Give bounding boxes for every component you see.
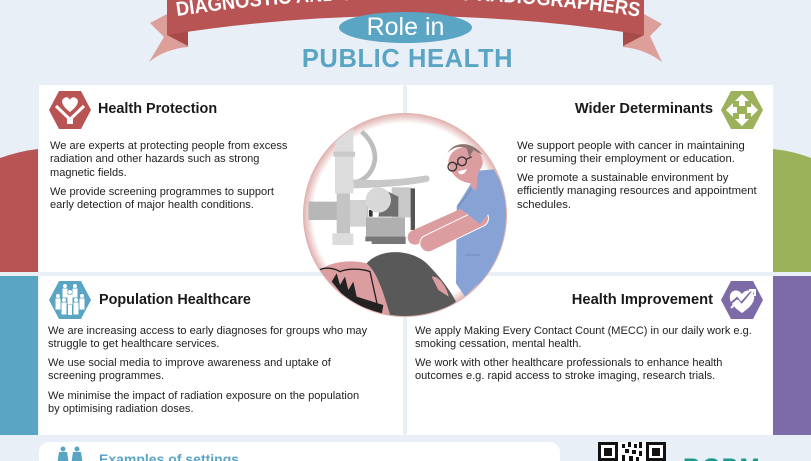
side band: red <box>0 149 38 272</box>
body text: We apply Making Every Contact Count (MECC) in our daily work e.g. <box>415 325 752 337</box>
qr code <box>598 442 666 461</box>
body text <box>50 186 274 211</box>
body text: early detection of major health conditions. <box>50 199 254 211</box>
icon: heart with trend <box>721 281 763 319</box>
body text: or resuming their employment or education. <box>517 153 735 165</box>
panel: health protection <box>39 85 403 272</box>
body text: We support people with cancer in maintaining <box>517 140 745 152</box>
icon: arrows <box>721 91 763 129</box>
heading: Health Improvement <box>572 292 713 308</box>
central illustration <box>303 113 507 317</box>
body text: outcomes e.g. rapid access to stroke imaging, research trials. <box>415 370 715 382</box>
role in pill <box>339 12 472 43</box>
body text: screening programmes. <box>48 370 164 382</box>
icon: people small <box>58 446 82 461</box>
body text <box>50 140 287 179</box>
side band: green <box>773 149 811 272</box>
body text: schedules. <box>517 199 571 211</box>
body text <box>517 172 757 211</box>
body text: magnetic fields. <box>50 167 127 179</box>
body text: We provide screening programmes to support <box>50 186 274 198</box>
patient <box>320 252 456 316</box>
side band: blue <box>0 276 38 435</box>
body text: We work with other healthcare professionals to enhance health <box>415 357 722 369</box>
body text <box>48 357 331 382</box>
icon: people <box>49 281 91 319</box>
body text: radiation and other hazards such as strong <box>50 153 259 165</box>
body text: by optimising radiation doses. <box>48 403 194 415</box>
body text <box>517 140 745 165</box>
panel: examples of settings <box>39 442 560 461</box>
heading: Health Protection <box>98 101 217 117</box>
side band: purple <box>773 276 811 435</box>
body text <box>48 325 368 350</box>
role in pill: Role in <box>367 13 444 41</box>
body text <box>415 325 752 350</box>
panel: health improvement <box>407 276 773 435</box>
panel: wider determinants <box>407 85 773 272</box>
panel: population healthcare <box>39 276 403 435</box>
body text: smoking cessation, mental health. <box>415 338 581 350</box>
body text: efficiently managing resources and appointment <box>517 185 757 197</box>
body text: We minimise the impact of radiation exposure on the population <box>48 390 359 402</box>
heading: Wider Determinants <box>575 101 713 117</box>
public health heading: PUBLIC HEALTH <box>302 45 513 73</box>
body text: We promote a sustainable environment by <box>517 172 728 184</box>
body text: We are increasing access to early diagnoses for groups who may <box>48 325 367 337</box>
icon: heart in hands <box>49 91 91 129</box>
body text: We are experts at protecting people from excess <box>50 140 287 152</box>
machine <box>308 128 430 245</box>
banner <box>149 0 662 62</box>
body text: struggle to get healthcare services. <box>48 338 219 350</box>
body text <box>415 357 722 382</box>
body text <box>48 390 359 415</box>
radiographer <box>415 144 510 297</box>
heading: Population Healthcare <box>99 292 251 308</box>
body text: We use social media to improve awareness and uptake of <box>48 357 331 369</box>
